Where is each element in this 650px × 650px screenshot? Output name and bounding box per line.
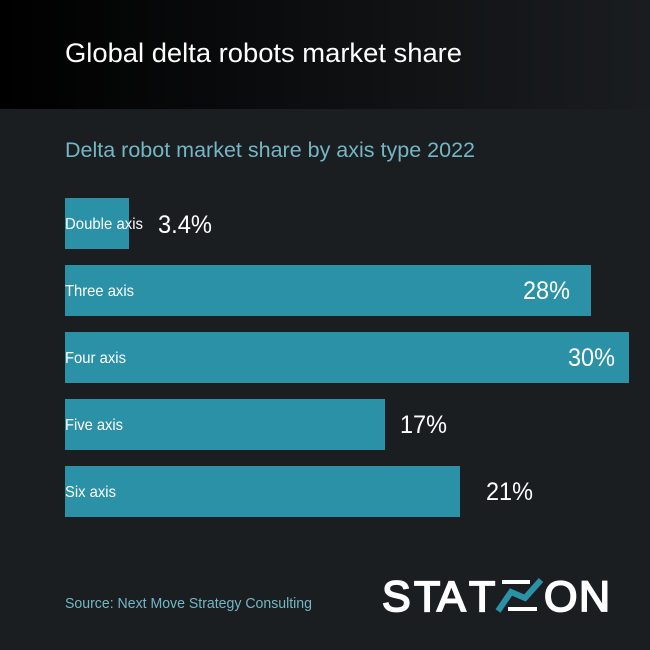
bar: three axis: Three axis — [65, 283, 134, 300]
bar: five axis: 17% — [400, 411, 447, 439]
logo: Statzon: ON — [544, 573, 610, 621]
bar: four axis: Four axis — [65, 350, 126, 367]
bar: double axis: 3.4% — [158, 211, 212, 239]
bar: four axis — [65, 332, 629, 383]
bar: double axis — [65, 198, 212, 249]
title: Global delta robots market share — [65, 38, 462, 68]
bar: four axis: 30% — [568, 344, 615, 372]
source: Source: Next Move Strategy Consulting — [65, 596, 312, 612]
bar chart — [65, 198, 629, 517]
bar: six axis: Six axis — [65, 484, 116, 501]
bar: five axis: Five axis — [65, 417, 123, 434]
bar: five axis — [65, 399, 447, 450]
header band — [0, 0, 650, 109]
logo: Statzon — [382, 573, 610, 621]
bar: three axis: 28% — [523, 277, 570, 305]
bar: six axis — [65, 466, 533, 517]
logo: Statzon: STAT — [382, 573, 495, 621]
bar: six axis: 21% — [486, 478, 533, 506]
bar: three axis — [65, 265, 591, 316]
bar: double axis: Double axis — [65, 216, 143, 233]
subtitle: Delta robot market share by axis type 2022 — [65, 138, 475, 162]
